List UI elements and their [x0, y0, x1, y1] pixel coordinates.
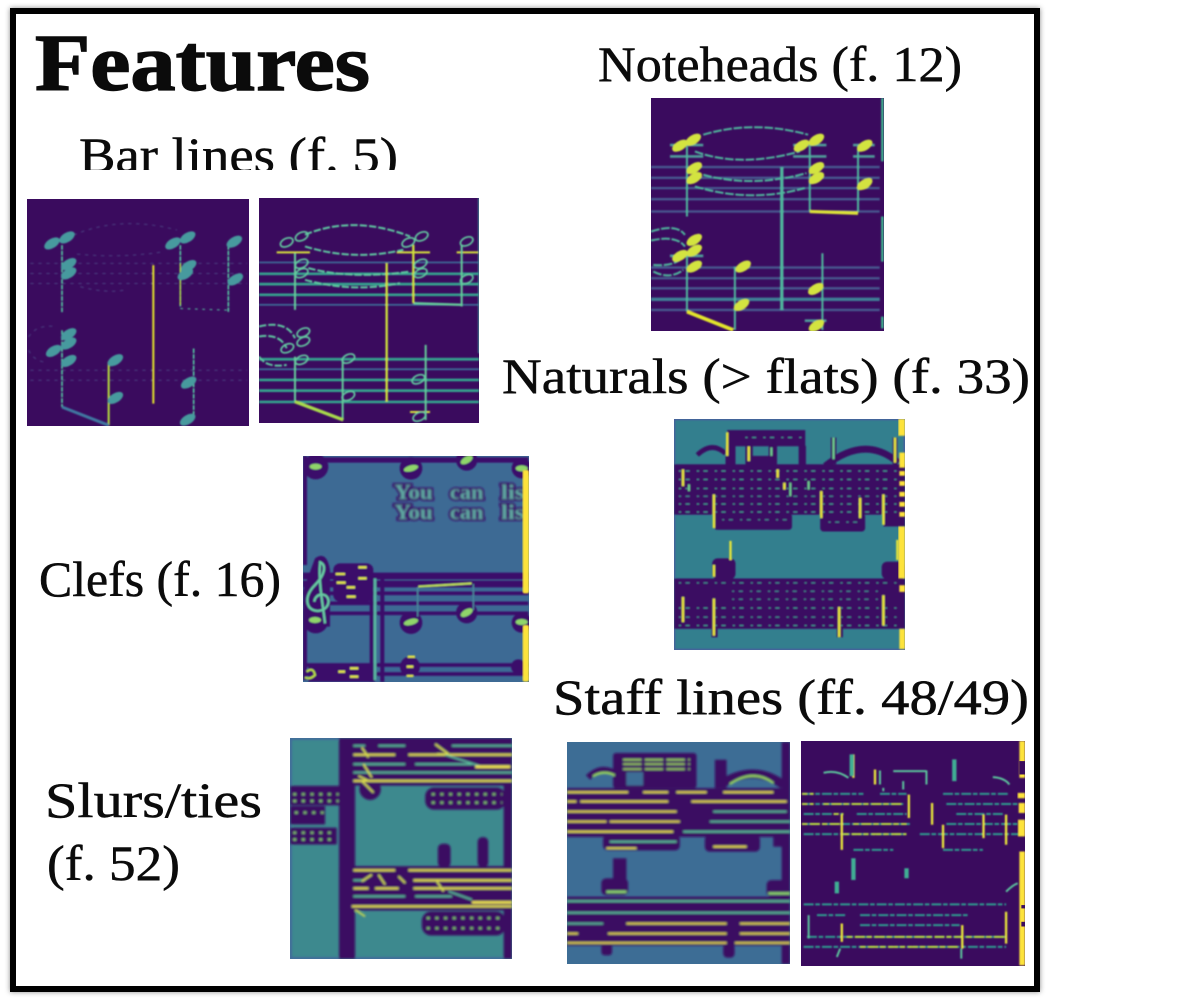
- feature map: naturals: [674, 419, 905, 650]
- ghost text in clef filter: can: [450, 502, 484, 524]
- heading: slurs and ties folio: (f. 52): [47, 835, 180, 891]
- heading: slurs and ties: Slurs/ties: [45, 772, 262, 828]
- heading: noteheads: Noteheads (f. 12): [598, 36, 962, 92]
- heading: bar lines: Bar lines (f. 5): [79, 127, 398, 183]
- feature map: slurs and ties: [290, 738, 512, 959]
- feature map: noteheads: [651, 98, 884, 331]
- feature map: bar lines, filter B: [259, 198, 479, 423]
- heading: staff lines: Staff lines (ff. 48/49): [553, 669, 1029, 725]
- ghost text in clef filter: can: [450, 482, 484, 504]
- feature map: staff lines, filter 49: [801, 741, 1025, 966]
- ghost text in clef filter: lis: [501, 482, 524, 504]
- feature map: staff lines, filter 48: [567, 742, 790, 964]
- heading: naturals: Naturals (> flats) (f. 33): [502, 348, 1030, 404]
- heading: clefs: Clefs (f. 16): [39, 551, 281, 607]
- ghost text in clef filter: lis: [501, 502, 524, 524]
- feature map: bar lines, filter A: [27, 199, 249, 426]
- ghost text in clef filter: You: [394, 502, 433, 524]
- feature map: clefs: [303, 456, 529, 682]
- title: Features: [35, 20, 370, 108]
- ghost text in clef filter: [394, 482, 524, 524]
- ghost text in clef filter: You: [394, 482, 433, 504]
